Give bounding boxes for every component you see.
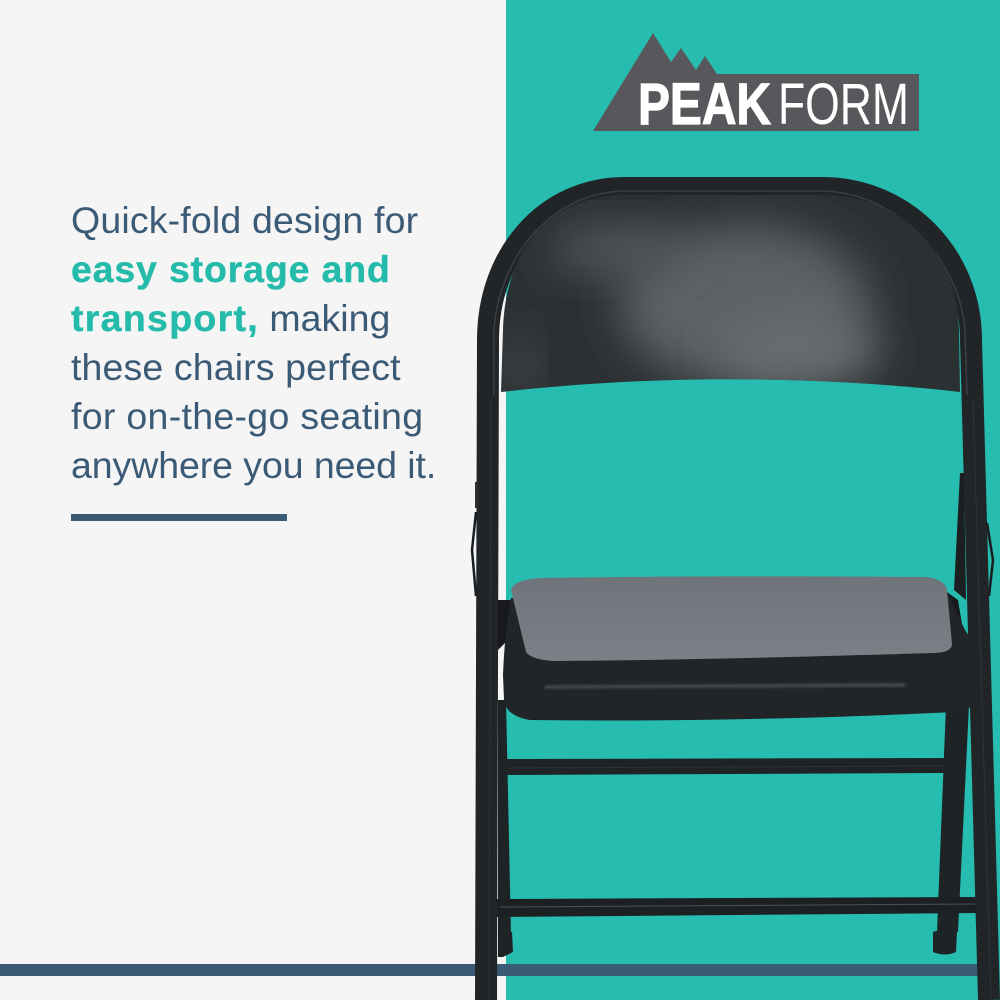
seat highlight	[545, 685, 905, 687]
seat top	[511, 576, 952, 661]
text block: description: Quick-fold design for	[71, 199, 418, 241]
text block: description	[71, 199, 436, 486]
accent rule under text	[71, 514, 287, 521]
rear legs	[498, 700, 969, 957]
bottom stripe	[0, 964, 979, 976]
text block: description: for on-the-go seating	[71, 395, 423, 437]
text block: description: transport, making	[71, 297, 390, 339]
hinges and straps	[472, 473, 993, 650]
seat body	[503, 594, 978, 721]
backrest	[495, 190, 965, 395]
text block: description: anywhere you need it.	[71, 444, 436, 486]
logo: PeakForm	[593, 33, 919, 134]
text block: description: easy storage and	[71, 248, 391, 290]
frame tubes	[486, 188, 991, 1000]
panel: teal background	[506, 0, 1000, 1000]
cross bars	[495, 758, 980, 917]
text block: description: these chairs perfect	[71, 346, 401, 388]
chair photo illustration	[470, 177, 1000, 1000]
